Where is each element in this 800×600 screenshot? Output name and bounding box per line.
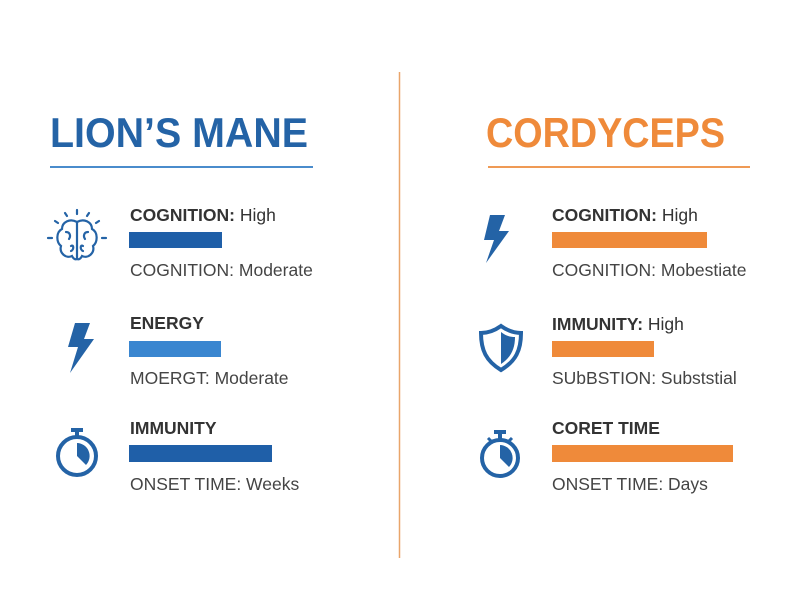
icon: stopwatch <box>482 430 518 476</box>
icon: bolt <box>68 323 94 373</box>
row: immunity <box>552 314 737 388</box>
title: cordyceps: CORDYCEPS <box>486 109 725 156</box>
panel: cordyceps <box>481 205 746 494</box>
icon: stopwatch <box>58 428 96 475</box>
row: energy: ENERGY <box>130 313 204 333</box>
row: cognition: COGNITION: High <box>130 205 276 225</box>
row: cognition: COGNITION: High <box>552 205 698 225</box>
icon: bolt <box>484 215 509 263</box>
row: onset time: CORET TIME <box>552 418 660 438</box>
row: onset time <box>552 418 733 494</box>
icon: shield <box>481 326 521 370</box>
row: onset time: ONSET TIME: Days <box>552 474 708 494</box>
row: energy <box>129 313 289 388</box>
row: cognition: COGNITION: Mobestiate <box>552 260 746 280</box>
icon: brain <box>48 210 106 259</box>
row: immunity <box>129 418 299 494</box>
row: immunity: IMMUNITY: High <box>552 314 684 334</box>
row: immunity: SUbBSTION: Subststial <box>552 368 737 388</box>
row: immunity: ONSET TIME: Weeks <box>130 474 299 494</box>
row: energy: MOERGT: Moderate <box>130 368 289 388</box>
panel: lion's mane <box>48 205 313 494</box>
row: cognition: COGNITION: Moderate <box>130 260 313 280</box>
row: cognition <box>129 205 313 280</box>
divider <box>398 72 400 558</box>
row: cognition <box>552 205 746 280</box>
row: immunity: IMMUNITY <box>130 418 217 438</box>
title: lion's mane: LION’S MANE <box>50 109 308 156</box>
